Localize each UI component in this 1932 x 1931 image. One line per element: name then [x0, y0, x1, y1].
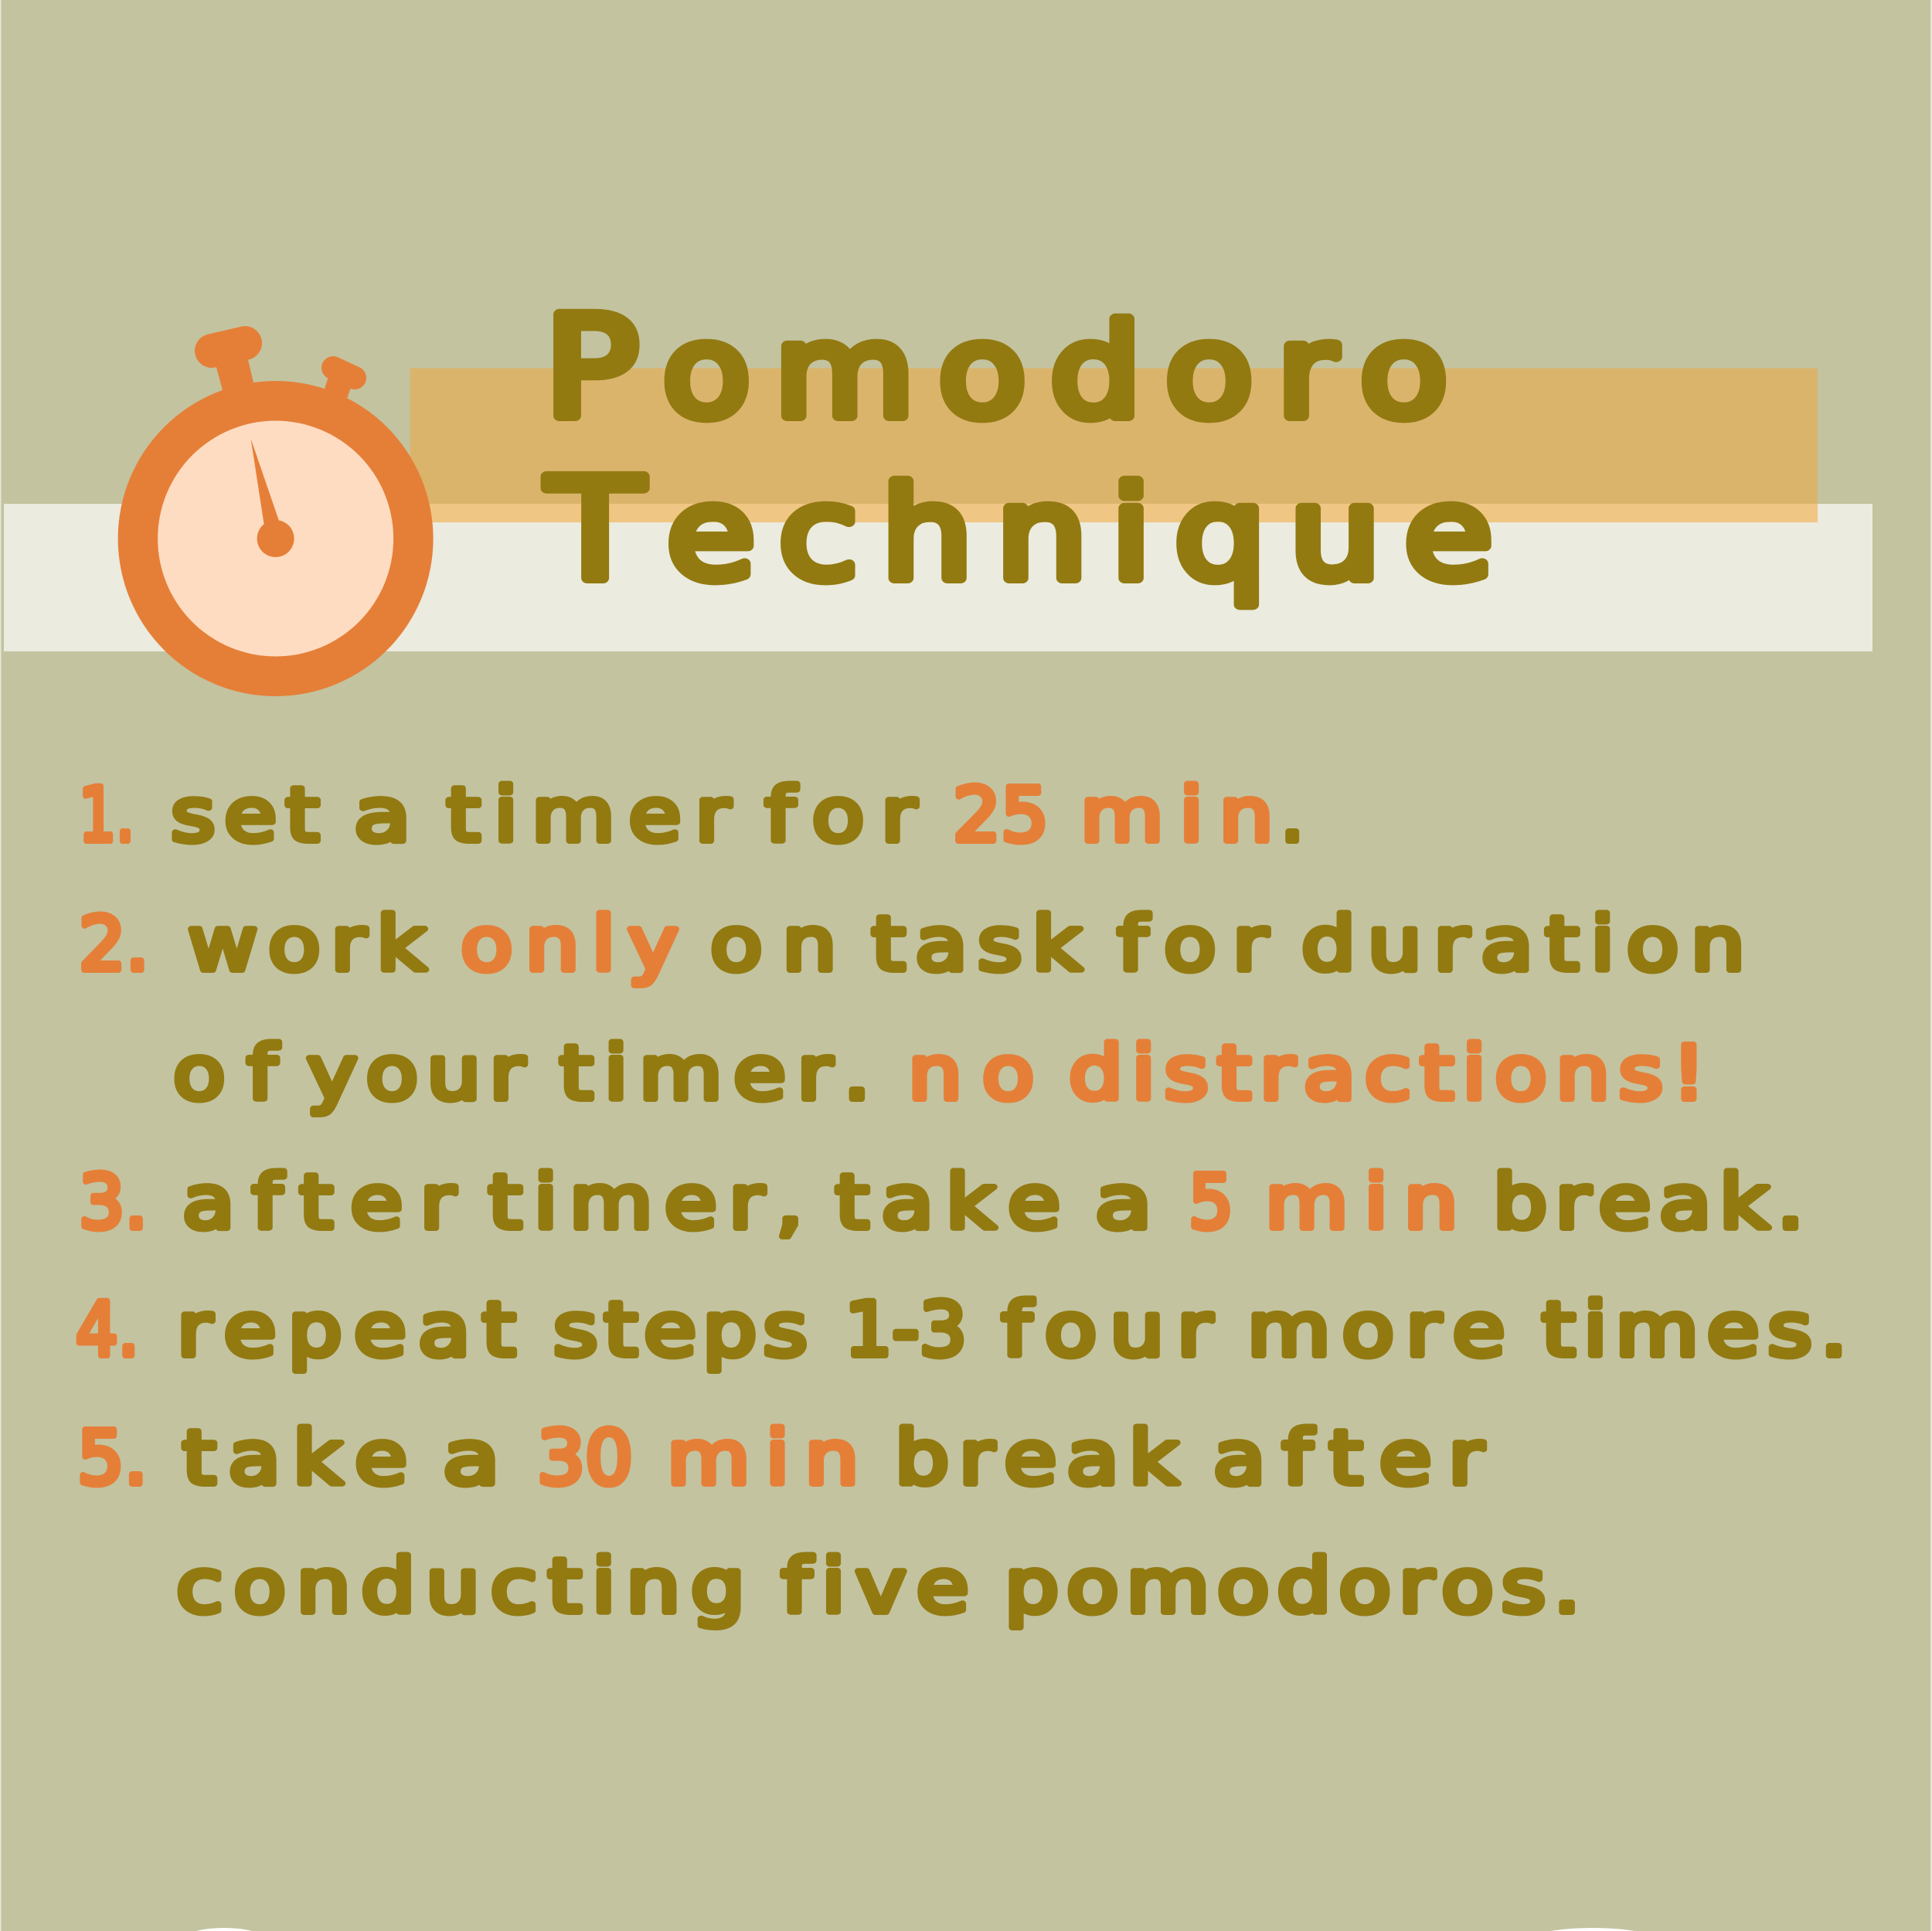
step 2: for — [1117, 902, 1268, 988]
step 3: break. — [1493, 1160, 1804, 1246]
heading band: gold block — [410, 368, 1818, 522]
step 5: min — [667, 1416, 859, 1501]
step 2: 2. — [79, 901, 149, 988]
step 1: set — [171, 773, 319, 858]
step 2 — [79, 901, 1745, 1117]
step 5: 30 — [537, 1415, 633, 1501]
step 5: a — [443, 1416, 500, 1501]
step 5: take — [182, 1416, 407, 1501]
step 2: of — [173, 1031, 279, 1117]
step 4: 4. — [76, 1287, 139, 1373]
step 5: pomodoros. — [1005, 1544, 1580, 1630]
step 2: distractions! — [1069, 1031, 1706, 1117]
step 2: task — [872, 902, 1082, 988]
step 5: after — [1213, 1416, 1484, 1501]
step 1 — [79, 772, 1304, 858]
step 2: work — [188, 902, 426, 988]
step 4 — [76, 1287, 1848, 1373]
title: Pomodoro — [544, 287, 1448, 449]
step 1: min — [1080, 773, 1274, 858]
title — [544, 287, 1493, 611]
step 1: a — [354, 773, 411, 858]
step 4: times. — [1542, 1287, 1848, 1373]
step 3: after — [182, 1160, 456, 1246]
step 5 — [77, 1415, 1580, 1630]
step 2: no — [908, 1031, 1034, 1117]
step 1: for — [765, 773, 917, 858]
step 2: on — [710, 902, 836, 988]
step 4: repeat — [177, 1287, 515, 1373]
step 3 — [79, 1159, 1804, 1246]
step 1: 25 — [953, 772, 1049, 858]
step 2: timer. — [560, 1031, 870, 1117]
step 3: take — [835, 1160, 1060, 1246]
step 3: 3. — [79, 1159, 148, 1246]
step 5: 5. — [77, 1415, 148, 1501]
step 2: your — [307, 1031, 525, 1117]
step 5: conducting — [176, 1544, 745, 1630]
step 3: a — [1095, 1160, 1152, 1246]
step 5: break — [895, 1416, 1179, 1501]
step 1: . — [1281, 772, 1304, 858]
step 4: more — [1247, 1287, 1505, 1373]
step 3: min — [1265, 1160, 1458, 1246]
step 2: duration — [1301, 902, 1745, 988]
step 3: timer, — [488, 1160, 803, 1246]
step 4: 1-3 — [845, 1287, 967, 1373]
step 4: steps — [553, 1287, 808, 1373]
heading band: white strip — [4, 504, 1872, 651]
step 2: only — [461, 902, 679, 988]
step 1: timer — [447, 773, 730, 858]
step 1: 1. — [79, 772, 134, 858]
icon: stopwatch — [118, 337, 434, 696]
step 3: 5 — [1189, 1159, 1233, 1246]
title: Technique — [546, 450, 1493, 611]
step 5: five — [781, 1544, 969, 1630]
step 4: four — [1002, 1287, 1213, 1373]
